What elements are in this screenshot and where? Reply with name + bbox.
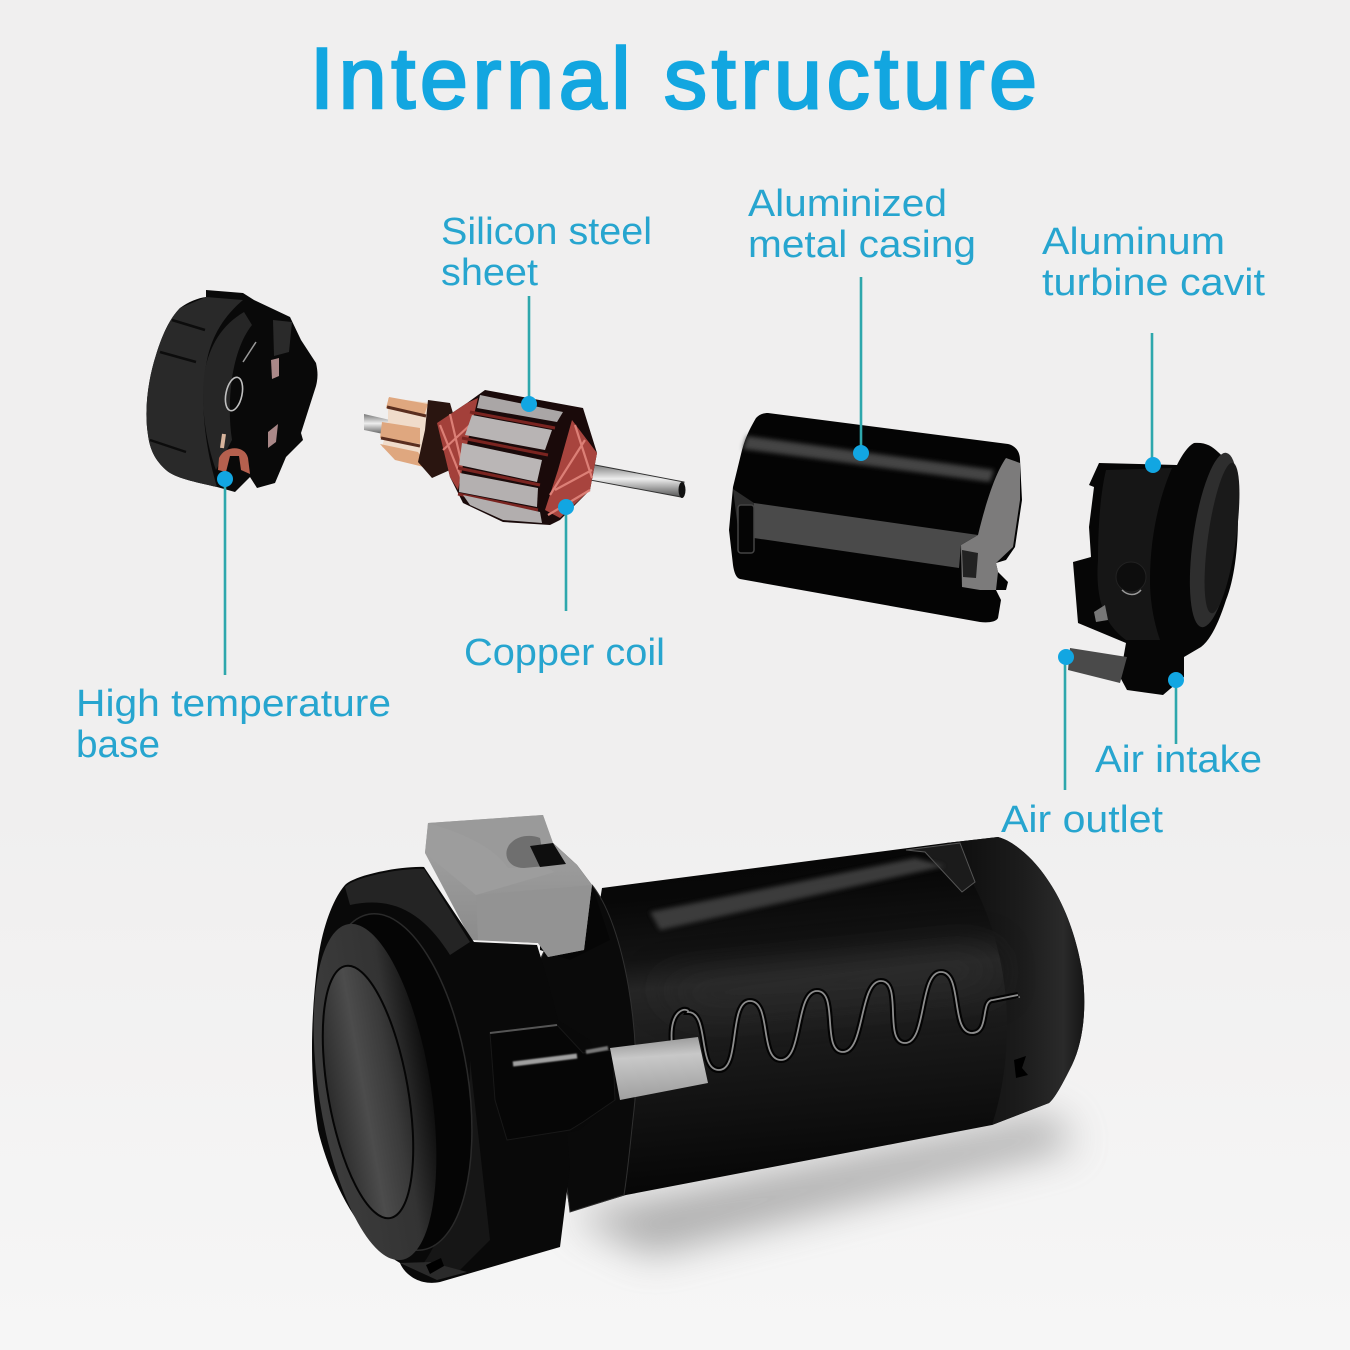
- part: aluminum turbine cavity: [1068, 443, 1247, 695]
- rear cap: [946, 837, 1084, 1125]
- callout: silicon steel sheet: [441, 211, 652, 412]
- callout: aluminized metal casing: Aluminized: [748, 183, 947, 225]
- body highlight: [650, 858, 945, 930]
- callout: air intake: [1095, 672, 1262, 781]
- part: assembled compressor: [293, 815, 1084, 1283]
- mounting bracket: [425, 815, 610, 960]
- callout: high temperature base: High temperature: [76, 683, 391, 725]
- part: armature with copper coil and silicon steel sheets: [364, 390, 686, 525]
- callout: high temperature base: base: [76, 724, 160, 766]
- air outlet nozzle: [1068, 648, 1127, 683]
- commutator: [382, 398, 450, 470]
- callout: silicon steel sheet: sheet: [441, 252, 538, 294]
- callout: copper coil: [464, 499, 665, 674]
- serpentine spring: [672, 972, 1018, 1070]
- callout: air outlet: [1001, 649, 1163, 841]
- callout: aluminized metal casing: metal casing: [748, 224, 976, 266]
- callout: copper coil: Copper coil: [464, 632, 665, 674]
- body cylinder: [560, 837, 1084, 1212]
- part: assembled compressor shadow: [570, 1115, 1075, 1255]
- front disc face: [306, 959, 430, 1225]
- callout: silicon steel sheet: Silicon steel: [441, 211, 652, 253]
- part: aluminized metal casing: [729, 413, 1022, 622]
- callout: air intake: Air intake: [1095, 739, 1262, 781]
- shaft left: [364, 414, 390, 435]
- mid ring: [540, 885, 636, 1212]
- part: high temperature base: [146, 290, 318, 492]
- callout: aluminized metal casing: [748, 183, 976, 461]
- shaft right: [590, 464, 684, 497]
- nozzle housing: [490, 1025, 615, 1140]
- callout: high temperature base: [76, 471, 391, 766]
- front disc black groove ring: [298, 903, 494, 1261]
- front housing flange: [312, 867, 613, 1283]
- front disc rim: [293, 915, 457, 1269]
- callout: aluminum turbine cavity: Aluminum: [1042, 221, 1225, 263]
- callout: aluminum turbine cavity: [1042, 221, 1265, 473]
- rotor core: [437, 390, 597, 525]
- callout: air outlet: Air outlet: [1001, 799, 1163, 841]
- title: Internal structure: [310, 31, 1037, 127]
- callout: aluminum turbine cavity: turbine cavit: [1042, 262, 1265, 304]
- metal pin: [610, 1037, 708, 1100]
